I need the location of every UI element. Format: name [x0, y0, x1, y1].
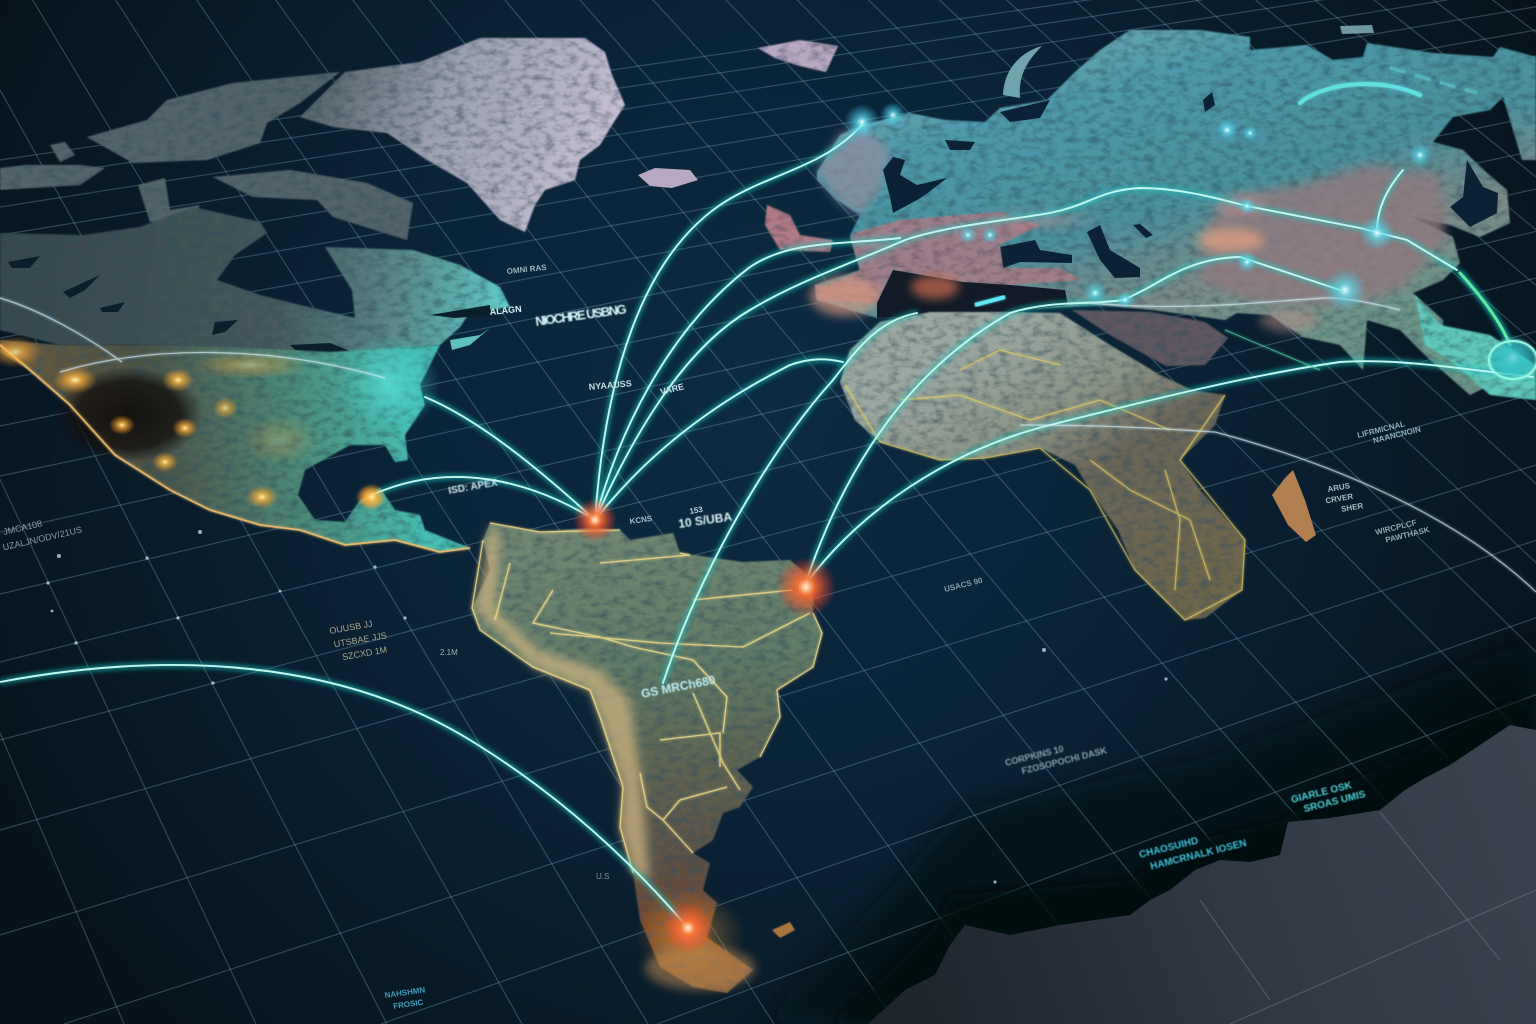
label: Antarctic coast block right: GIARLE OSK — [1290, 780, 1354, 806]
landmass: Africa — [840, 312, 1245, 620]
arc: Venezuela to Western Europe — [595, 238, 900, 520]
region lights: Central and East Asia — [970, 195, 1320, 332]
label: mid-Atlantic value: VARE — [659, 381, 685, 397]
label: South America value: GS MRCh680 — [640, 673, 717, 701]
label: Canada note: OMNI RAS — [506, 263, 548, 276]
label: Pacific value: 2.1M — [440, 648, 458, 657]
label: Southeast Pacific block: OUUSB JJ — [329, 619, 373, 636]
landmass: Svalbard — [758, 40, 838, 72]
arc: Brazil to Indian Ocean — [805, 361, 1533, 585]
label: Antarctic coast block left: HAMCRNALK IOSEN — [1149, 838, 1248, 873]
label: Indian Ocean middle block: SHER — [1340, 501, 1364, 514]
broad shadow above Antarctica — [760, 640, 1536, 1024]
region lights: Iberia — [810, 276, 880, 316]
fire texture: Patagonia — [635, 890, 755, 990]
landmass: Northern island — [1340, 25, 1374, 34]
label: Newfoundland tag: ALAGN — [489, 304, 522, 317]
region tint: China — [1200, 165, 1445, 305]
hub glow: Central America — [358, 483, 386, 511]
label: Pacific block: UZALJN/ODV/21US — [2, 524, 83, 552]
outline glow: North America coast — [0, 345, 470, 552]
landmass: Canada — [0, 207, 510, 355]
label: Indian Ocean upper block: LIFRMICNAL — [1356, 419, 1406, 440]
label: Caribbean tag: ISD: APEX — [448, 477, 499, 497]
landmass: Indonesian islands — [1415, 295, 1536, 400]
label: mid-Atlantic tag: NYAAUSS — [588, 378, 632, 392]
arc: Brazil to Middle East and Asia — [805, 257, 1340, 585]
hub glow: Patagonia — [662, 902, 714, 954]
arc: Venezuela to Scandinavia — [595, 125, 862, 520]
lakes: northern Canada — [8, 256, 490, 365]
label: Southeast Pacific block: UTSBAE JJS — [333, 630, 387, 649]
Mediterranean dark sea with glow — [877, 270, 1068, 318]
label: bottom tag: FROSIC — [393, 998, 424, 1011]
arc: Pacific to Patagonia — [0, 665, 688, 928]
landmass: Antarctica — [868, 725, 1536, 1024]
tight shadow along Antarctic coast — [830, 700, 1536, 1024]
label: Indian Ocean lower block: PAWTHASK — [1384, 525, 1431, 545]
label: Antarctic coast block left: CHAOSUIHD — [1138, 836, 1199, 861]
label: South Atlantic block: CORPKINS 10 — [1004, 744, 1065, 768]
label: Indian Ocean middle block: CRVER — [1325, 492, 1354, 505]
label: South Pacific tag: U.S — [596, 872, 609, 881]
city lights: dark interior of North America — [53, 367, 203, 463]
landmass: Falkland Islands — [772, 922, 795, 938]
cyan streak: Eastern Mediterranean — [975, 297, 1005, 305]
hub glow: Venezuela — [573, 498, 617, 542]
label: Antarctic coast block right: SROAS UMIS — [1303, 789, 1367, 815]
landmass: South America — [472, 523, 822, 993]
hub nodes: Eurasia cyan — [844, 102, 1536, 382]
road lights: South America — [472, 523, 822, 873]
region tint: Scandinavia — [817, 125, 890, 215]
landmass: Novaya Zemlya arc — [1003, 46, 1042, 98]
hub glow: Brazil — [776, 557, 836, 617]
region lights: Europe — [765, 205, 1082, 303]
landmass: Arabia — [1072, 310, 1228, 366]
landmass: Eurasia — [815, 30, 1536, 395]
arc: Venezuela across Eurasia — [595, 188, 1457, 520]
label: equator tag: KCNS — [629, 514, 653, 526]
label: Pacific block: JMCA108 — [2, 518, 43, 537]
arc: Siberia dashed — [1390, 68, 1477, 93]
arc: Venezuela to Central America — [372, 477, 595, 520]
Antarctica grid lines — [1200, 812, 1536, 1024]
arc: Brazil inland to Morocco — [663, 313, 917, 683]
label: Indian Ocean lower block: WIRCPLCF — [1374, 518, 1418, 537]
label: equator value small: 153 — [689, 505, 704, 516]
landmass: Madagascar — [1272, 470, 1316, 542]
map labels — [0, 263, 1431, 1012]
label: Indian Ocean upper block: NAANCNOIN — [1372, 425, 1422, 445]
target ring: Southeast Asia — [1489, 341, 1536, 379]
label: South Atlantic block: FZOSOPOCHI DASK — [1021, 745, 1108, 776]
city lights: North America amber — [0, 336, 440, 509]
arc: Southeast Asia green — [1460, 273, 1510, 345]
landmass: Iceland — [638, 168, 698, 188]
label: equator value: 10 S/UBA — [677, 510, 733, 531]
grid node dots — [46, 530, 1168, 884]
road lights: Africa — [845, 350, 1245, 620]
connection arcs — [0, 125, 1533, 928]
arc: Venezuela to North Africa — [595, 359, 843, 520]
landmass: Greenland — [300, 38, 625, 232]
landmass: Labrador and Newfoundland — [450, 328, 490, 350]
arc: Siberia highlight — [1300, 84, 1420, 103]
seas: inland waters of Eurasia — [883, 92, 1498, 278]
label: bottom tag: NAHSHMN — [384, 985, 426, 1000]
landmass: United States and Mexico — [0, 340, 470, 552]
thin secondary arcs — [0, 298, 1536, 592]
label: Atlantic small tag: USACS 90 — [943, 576, 984, 594]
arc: East Asia link — [1377, 170, 1403, 228]
lit band: Andes west coast — [475, 525, 650, 880]
label: Southeast Pacific block: SZCXD 1M — [341, 644, 388, 662]
label: Indian Ocean middle block: ARUS — [1327, 481, 1351, 494]
label: North Atlantic heading: NIOCHRE USBNG — [534, 301, 628, 329]
landmass: Arctic archipelago — [0, 72, 413, 240]
arc: Venezuela to US East Coast — [425, 397, 595, 520]
